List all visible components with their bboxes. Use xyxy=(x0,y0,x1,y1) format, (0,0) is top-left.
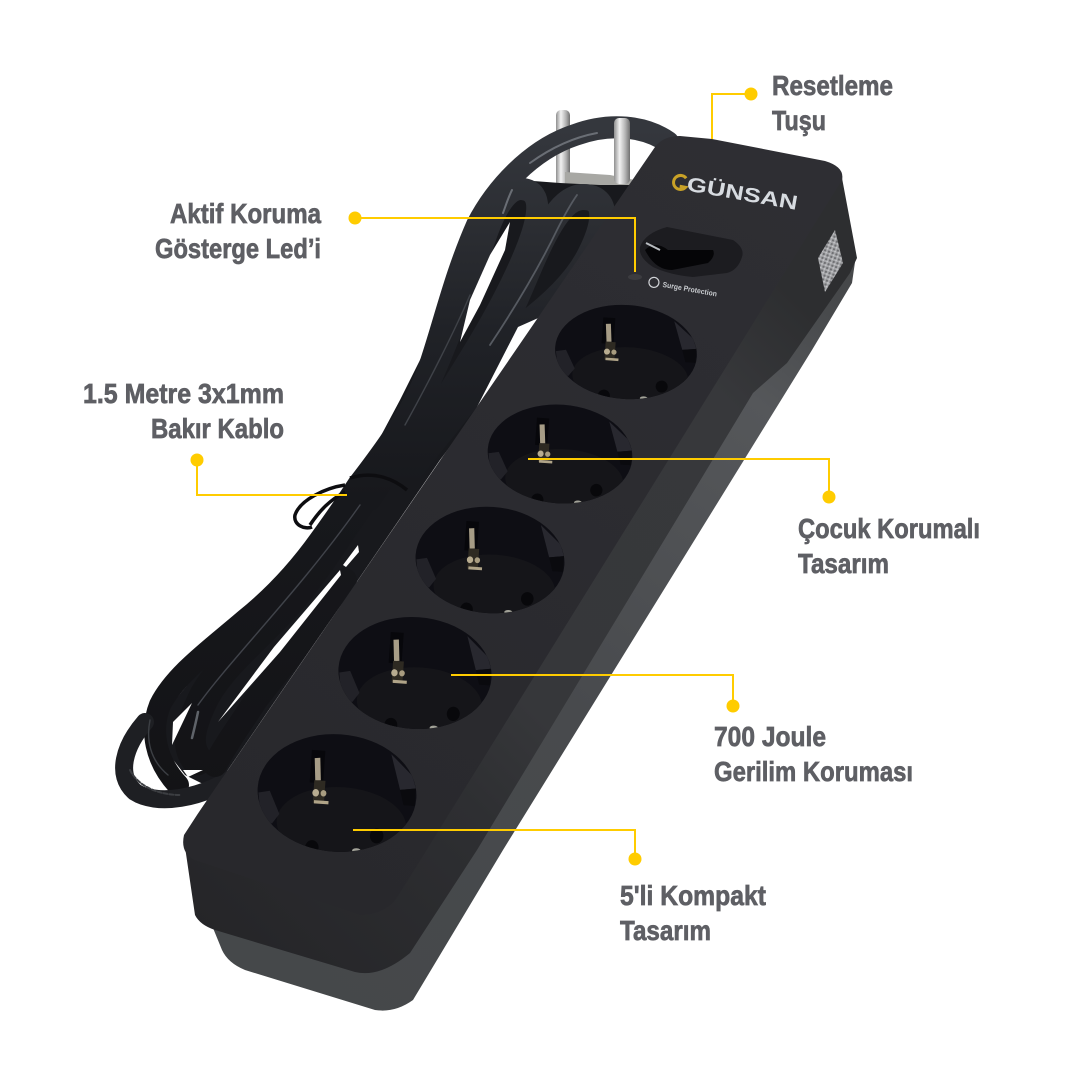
socket 5 xyxy=(253,729,420,867)
socket 2 xyxy=(484,400,636,517)
plug bar xyxy=(565,172,635,186)
lower cable by strip xyxy=(215,580,345,765)
socket 1 xyxy=(551,300,700,412)
cable tie xyxy=(295,475,407,528)
callout: Aktif Koruma Gösterge Led'i: Gösterge Led’i xyxy=(155,233,321,264)
QR code xyxy=(818,230,843,292)
surge protection label xyxy=(648,277,718,298)
callout: Çocuk Korumalı Tasarım xyxy=(528,459,980,579)
callout: Çocuk Korumalı Tasarım: Çocuk Korumalı xyxy=(798,513,980,544)
cable loop two xyxy=(410,197,602,470)
infographic canvas xyxy=(84,74,979,1011)
callout: 700 Joule Gerilim Koruması: 700 Joule xyxy=(714,721,826,752)
surge protection label: Surge Protection xyxy=(662,280,718,298)
callout: Aktif Koruma Gösterge Led'i xyxy=(155,198,635,272)
logo xyxy=(672,170,799,215)
logo: GÜNSAN xyxy=(685,173,799,215)
cable highlights xyxy=(130,133,597,795)
upper housing side xyxy=(184,150,857,973)
bottom cable loop xyxy=(124,722,245,799)
cable bundle and plug xyxy=(124,110,668,815)
callout: 700 Joule Gerilim Koruması xyxy=(451,675,913,787)
callout: Resetleme Tuşu: Tuşu xyxy=(772,105,826,136)
callout: 1.5 Metre 3x1mm Bakır Kablo: 1.5 Metre 3x1mm xyxy=(83,378,284,409)
callout: 1.5 Metre 3x1mm Bakır Kablo: Bakır Kablo xyxy=(151,413,284,444)
dark cable mass xyxy=(150,180,645,815)
power strip body xyxy=(183,136,857,1011)
callout: 5'li Kompakt Tasarım: Tasarım xyxy=(620,915,711,946)
lower housing xyxy=(213,262,855,1011)
switch xyxy=(640,227,743,277)
top face xyxy=(183,136,842,915)
callout: 700 Joule Gerilim Koruması: Gerilim Koruması xyxy=(714,756,913,787)
socket 3 xyxy=(411,502,568,627)
socket 4 xyxy=(334,612,495,744)
callout: Çocuk Korumalı Tasarım: Tasarım xyxy=(798,548,889,579)
cable loop one xyxy=(370,189,537,500)
callout: 5'li Kompakt Tasarım xyxy=(353,830,766,946)
callout: Resetleme Tuşu xyxy=(712,70,893,139)
LED indicator xyxy=(628,274,642,280)
gaps between cables xyxy=(142,222,545,780)
callout: Resetleme Tuşu: Resetleme xyxy=(772,70,893,101)
outer cable xyxy=(155,127,668,785)
plug right pin xyxy=(614,118,630,184)
callout: 1.5 Metre 3x1mm Bakır Kablo xyxy=(83,378,347,495)
callout: 5'li Kompakt Tasarım: 5'li Kompakt xyxy=(620,880,766,911)
callout: Aktif Koruma Gösterge Led'i: Aktif Koruma xyxy=(170,198,321,229)
thick teardrop cable xyxy=(190,465,385,760)
plug left pin xyxy=(556,110,570,187)
